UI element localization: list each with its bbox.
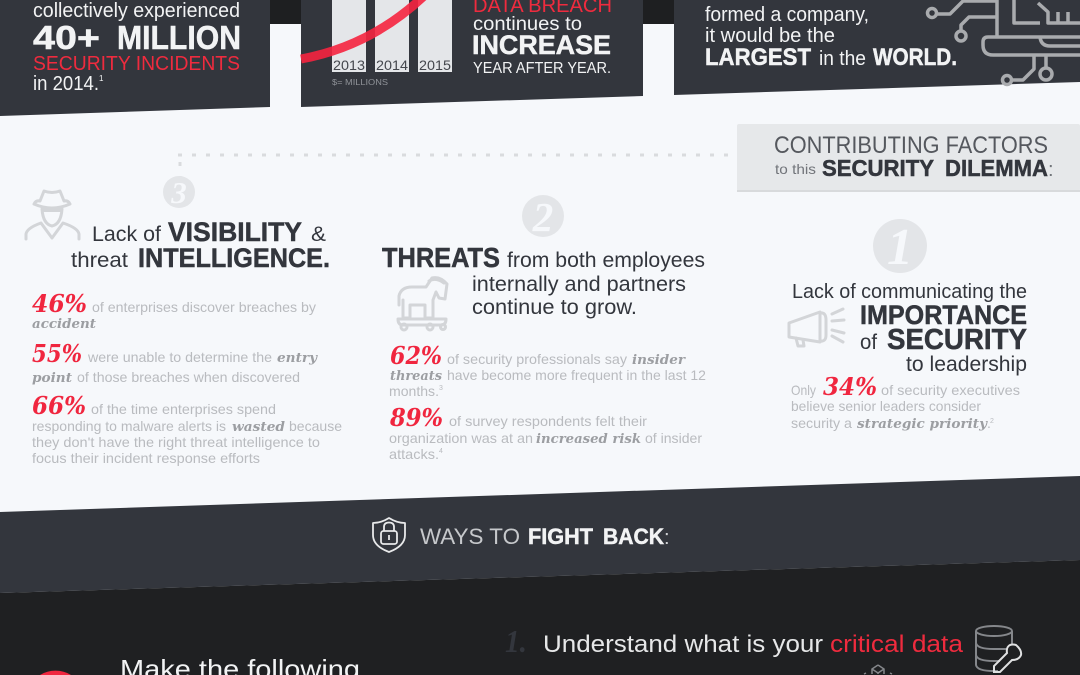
- stat: 89%: organization was at an: [389, 430, 533, 446]
- stat: 62%: of security professionals say: [447, 351, 627, 367]
- panel: 40+ million security incidents: SECURITY INCIDENTS: [33, 53, 240, 75]
- stat: 34%: believe senior leaders consider: [791, 398, 981, 414]
- icon: megaphone: [789, 309, 844, 346]
- stat: 55%: 55%: [32, 339, 82, 368]
- number badge 3: 3: [170, 175, 187, 210]
- panel: 40+ million security incidents: in 2014.: [33, 73, 99, 95]
- icon: shield with lock: [373, 518, 405, 552]
- stat: 62%: 3: [439, 385, 443, 392]
- heading: contributing factors: CONTRIBUTING FACTORS: [774, 132, 1048, 159]
- band: ways to fight back: [0, 476, 1080, 593]
- panel: factor 3 visibility: [26, 175, 342, 466]
- step 1: critical data: [505, 623, 1021, 672]
- heading: importance of security: to leadership: [906, 353, 1027, 376]
- panel: 40+ million security incidents: 1: [99, 74, 104, 83]
- bar chart: 2013 to 2015: 2013: [333, 57, 365, 73]
- stat: 55%: point: [32, 371, 72, 386]
- icon: cube network: [864, 665, 892, 674]
- heading: lack of visibility: threat: [71, 249, 128, 272]
- bar chart: 2013 to 2015: $= MILLIONS: [332, 78, 388, 87]
- stat: 46%: 46%: [32, 289, 87, 318]
- band: ways to fight back: :: [664, 527, 670, 549]
- stat: 46%: of enterprises discover breaches by: [92, 299, 316, 315]
- heading: contributing factors: to this: [775, 161, 816, 177]
- stat: 62%: months.: [389, 383, 439, 399]
- panel: data breach cost bar chart: YEAR AFTER YEAR.: [473, 60, 611, 77]
- panel: 40+ million security incidents: collectively experienced: [33, 0, 240, 22]
- bar chart: 2013 to 2015: [301, 0, 452, 87]
- heading: lack of visibility: INTELLIGENCE.: [138, 243, 330, 273]
- stat: 89%: increased risk: [536, 432, 641, 447]
- stat: 46%: [32, 289, 316, 332]
- stat: 34%: Only: [791, 382, 816, 398]
- heading: contributing factors: [737, 124, 1080, 192]
- recommendation intro: [40, 654, 360, 675]
- heading: lack of visibility: VISIBILITY: [168, 217, 302, 247]
- heading: importance of security: [792, 281, 1027, 376]
- panel: largest company in the world: LARGEST: [705, 44, 811, 71]
- heading: contributing factors: DILEMMA: [945, 155, 1048, 181]
- heading: importance of security: IMPORTANCE: [860, 300, 1027, 330]
- stat: 62%: [389, 341, 706, 399]
- stat: 89%: [389, 403, 702, 462]
- panel: data breach cost bar chart: [301, 0, 643, 107]
- panel: data breach cost bar chart: INCREASE: [472, 30, 611, 60]
- heading: importance of security: SECURITY: [887, 324, 1027, 356]
- icon: circuit skull: [928, 0, 1080, 84]
- stat: 66%: of the time enterprises spend: [91, 401, 276, 417]
- number badge 1: [873, 219, 927, 276]
- stat: 89%: 89%: [389, 403, 443, 432]
- panel: largest company in the world: in the: [819, 48, 866, 70]
- stat: 62%: have become more frequent in the last 12: [447, 367, 706, 383]
- icon: spy: [26, 191, 79, 239]
- panel: data breach cost bar chart: continues to: [473, 14, 582, 35]
- heading: lack of visibility: [71, 217, 330, 273]
- panel: factor 2 threats: [382, 194, 706, 462]
- number badge 1: 1: [887, 219, 913, 276]
- panel: 40+ million security incidents: MILLION: [117, 19, 241, 56]
- heading: contributing factors: SECURITY: [822, 155, 934, 181]
- stat: 34%: .: [987, 415, 991, 431]
- stat: 66%: 66%: [32, 391, 86, 420]
- heading: threats: continue to grow.: [472, 296, 637, 319]
- stat: 55%: entry: [277, 351, 319, 366]
- stat: 34%: 2: [990, 418, 994, 425]
- stat: 46%: accident: [32, 317, 96, 332]
- stat: 34%: security a: [791, 415, 852, 431]
- step 1: critical data: critical data: [830, 631, 964, 658]
- panel: largest company in the world: formed a company,: [705, 4, 869, 26]
- panel: largest company in the world: [674, 0, 1080, 95]
- icon: trojan horse: [398, 278, 447, 330]
- heading: threats: THREATS: [382, 242, 500, 273]
- heading: lack of visibility: Lack of: [92, 223, 161, 246]
- number badge 2: [522, 194, 564, 240]
- stat: 66%: because: [289, 418, 342, 434]
- stat: 66%: focus their incident response efforts: [32, 450, 260, 466]
- stat: 66%: responding to malware alerts is: [32, 418, 226, 434]
- stat: 62%: insider: [632, 353, 686, 368]
- stat: 34%: of security executives: [881, 382, 1020, 398]
- panel: 40+ million security incidents: 40+: [33, 19, 100, 56]
- stat: 89%: of survey respondents felt their: [449, 413, 647, 429]
- panel: 40+ million security incidents: [0, 0, 270, 116]
- step 1: critical data: Understand what is your: [543, 631, 823, 658]
- step 1: critical data: 1.: [505, 623, 527, 659]
- stat: 89%: attacks.: [389, 446, 439, 462]
- heading: lack of visibility: &: [311, 223, 326, 246]
- section: dark recommendations background: [0, 560, 1080, 675]
- icon: database and key: [976, 626, 1021, 672]
- heading: threats: internally and partners: [472, 273, 686, 296]
- stat: 66%: they don't have the right threat intelligence to: [32, 434, 320, 450]
- panel: largest company in the world: WORLD.: [873, 44, 957, 71]
- heading: importance of security: Lack of communicating the: [792, 281, 1027, 303]
- bar chart: 2013 to 2015: 2014: [376, 57, 408, 73]
- band: ways to fight back: FIGHT: [528, 524, 594, 549]
- heading: importance of security: of: [860, 331, 877, 354]
- number badge 2: 2: [532, 194, 553, 240]
- band: ways to fight back: WAYS TO: [420, 524, 520, 549]
- stat: 55%: of those breaches when discovered: [77, 369, 300, 385]
- panel: largest company in the world: it would be the: [705, 25, 835, 47]
- stat: 66%: [32, 391, 342, 466]
- icon: red circle: [40, 671, 71, 675]
- stat: 34%: 34%: [823, 372, 877, 401]
- number badge 3: [163, 175, 195, 210]
- heading: contributing factors: :: [1048, 159, 1054, 181]
- stat: 34%: [791, 372, 1020, 432]
- heading: threats: [382, 242, 705, 319]
- stat: 55%: were unable to determine the: [87, 349, 272, 365]
- stat: 89%: 4: [439, 448, 443, 455]
- bar chart: 2013 to 2015: 2015: [419, 57, 451, 73]
- stat: 66%: wasted: [232, 420, 285, 435]
- band: ways to fight back: BACK: [603, 524, 664, 549]
- stat: 34%: strategic priority: [857, 417, 988, 432]
- stat: 55%: [32, 339, 319, 386]
- stat: 62%: 62%: [390, 341, 442, 370]
- stat: 89%: of insider: [645, 430, 702, 446]
- dotted connector: [178, 155, 736, 180]
- stat: 62%: threats: [390, 369, 443, 384]
- heading: threats: from both employees: [507, 249, 705, 272]
- panel: factor 1 importance of security: [789, 219, 1027, 432]
